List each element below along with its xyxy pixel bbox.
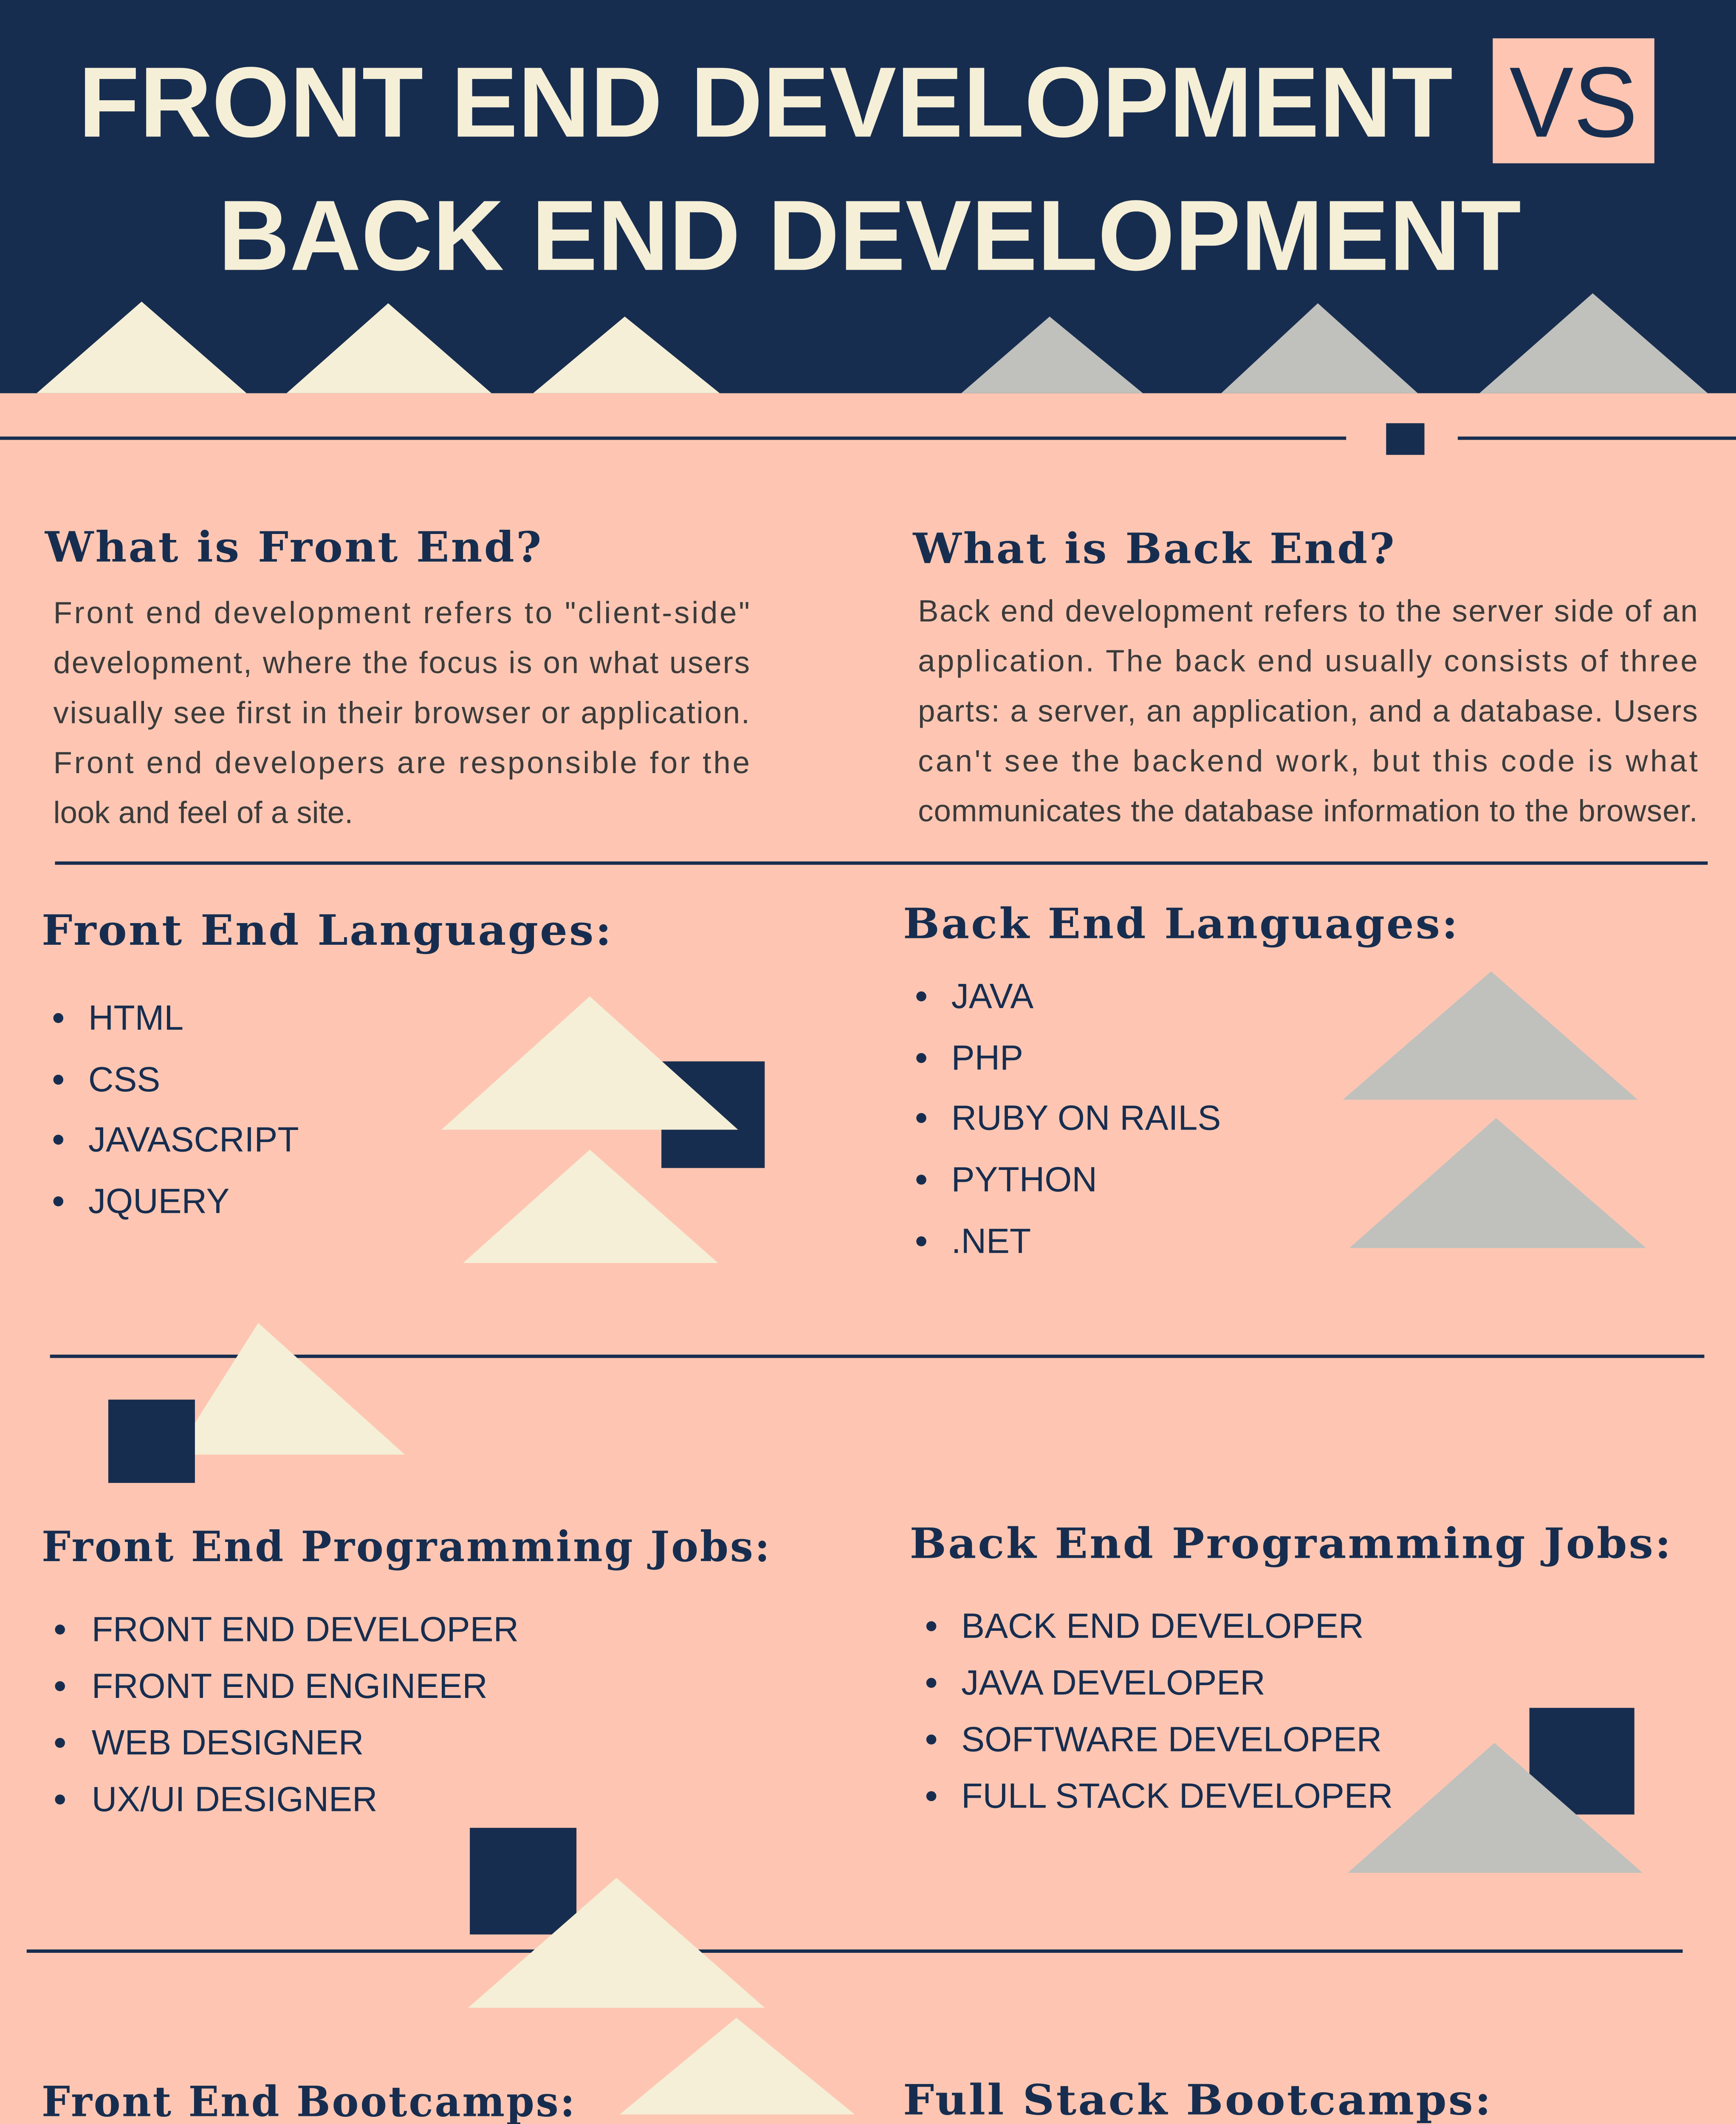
panel: what is back end: What is Back End? — [912, 525, 1396, 573]
panel: back end jobs — [910, 1519, 1673, 1816]
panel: front end jobs: Front End Programming Jobs: — [42, 1522, 771, 1571]
panel: back end languages — [903, 899, 1459, 1261]
panel: front end jobs: WEB DESIGNER — [92, 1723, 364, 1762]
decor: front languages shapes — [441, 997, 765, 1263]
header triangles — [37, 293, 1708, 393]
panel: front end languages: HTML — [88, 998, 183, 1037]
panel: back end languages: Back End Languages: — [903, 899, 1459, 948]
panel: what is back end: can't see the backend work, but this code is what — [918, 744, 1698, 778]
panel: what is back end: parts: a server, an application, and a database. Users — [918, 694, 1698, 728]
panel: back end languages: PHP — [951, 1038, 1023, 1077]
panel: front end jobs: FRONT END ENGINEER — [92, 1666, 488, 1706]
panel: front end languages: JQUERY — [88, 1181, 229, 1220]
title: VS — [1510, 46, 1638, 158]
panel: what is back end: application. The back end usually consists of three — [918, 644, 1698, 678]
panel: full stack bootcamps: Full Stack Bootcamps: — [903, 2076, 1493, 2124]
panel: what is front end: Front end developers are responsible for the — [54, 746, 750, 780]
title — [78, 38, 1654, 291]
panel: what is front end: look and feel of a site. — [54, 796, 353, 830]
panel: back end jobs: BACK END DEVELOPER — [961, 1607, 1364, 1646]
panel: front end languages: CSS — [88, 1060, 160, 1099]
decor: back jobs shapes — [1348, 1708, 1643, 1873]
panel: back end jobs: Back End Programming Jobs: — [910, 1519, 1673, 1568]
decor: back languages triangles — [1343, 972, 1646, 1248]
panel: front end jobs: FRONT END DEVELOPER — [92, 1610, 519, 1649]
header band — [0, 0, 1736, 393]
panel: front end languages: JAVASCRIPT — [88, 1120, 299, 1159]
panel: back end jobs: JAVA DEVELOPER — [961, 1663, 1265, 1702]
panel: what is back end: Back end development refers to the server side of an — [918, 594, 1698, 628]
panel: what is back end — [912, 525, 1698, 828]
panel: back end jobs: FULL STACK DEVELOPER — [961, 1777, 1393, 1816]
panel: back end jobs: SOFTWARE DEVELOPER — [961, 1720, 1382, 1759]
panel: what is front end: development, where the focus is on what users — [54, 646, 750, 680]
panel: front end languages — [42, 906, 613, 1220]
panel: front end jobs: UX/UI DESIGNER — [92, 1780, 377, 1819]
panel: back end languages: PYTHON — [951, 1160, 1097, 1199]
panel: front end languages: Front End Languages: — [42, 906, 613, 955]
panel: back end languages: .NET — [951, 1222, 1031, 1261]
small square marker — [1386, 423, 1425, 455]
title: BACK END DEVELOPMENT — [218, 179, 1521, 291]
panel: front end jobs — [42, 1522, 771, 1819]
panel: what is front end: visually see first in their browser or application. — [54, 695, 750, 730]
decor: triangle and square — [108, 1323, 405, 1483]
panel: back end languages: RUBY ON RAILS — [951, 1098, 1221, 1137]
decor: front jobs shapes — [468, 1828, 855, 2114]
panel: what is back end: communicates the database information to the browser. — [918, 794, 1698, 828]
panel: what is front end: What is Front End? — [45, 523, 543, 572]
panel: what is front end: Front end development refers to "client-side" — [54, 596, 750, 630]
panel: what is front end — [45, 523, 750, 830]
panel: back end languages: JAVA — [951, 977, 1033, 1016]
title: FRONT END DEVELOPMENT — [78, 46, 1453, 158]
